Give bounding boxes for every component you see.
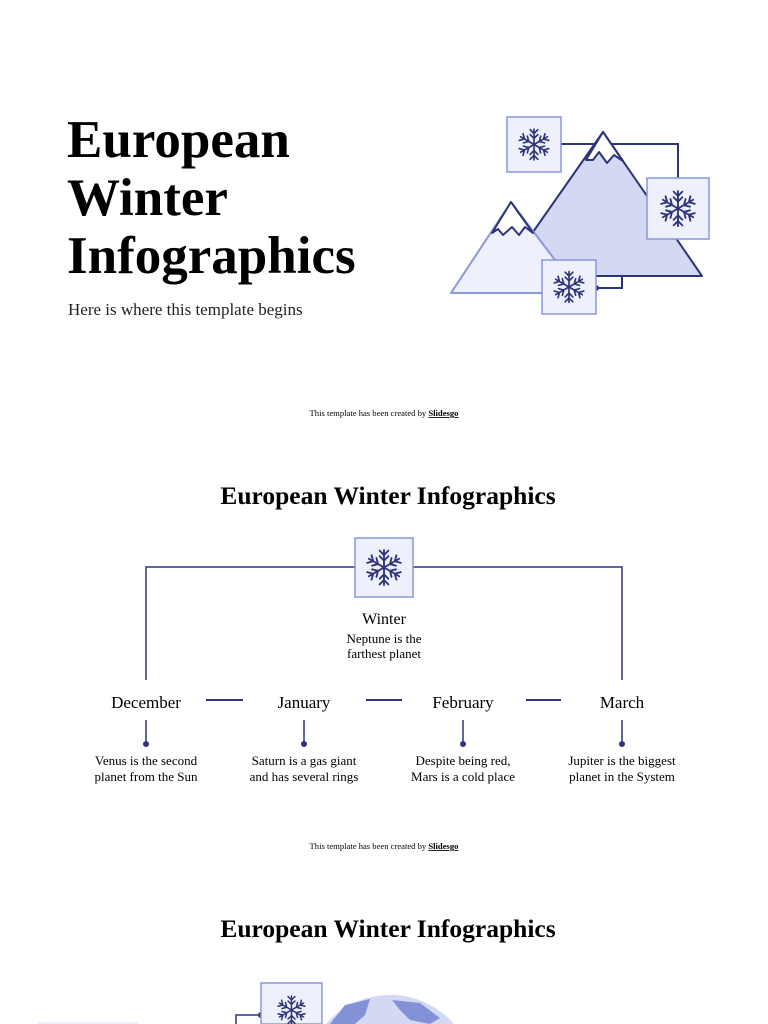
left panel (38, 1022, 138, 1024)
month: January (250, 693, 358, 784)
icon: winter snowflake box (355, 538, 413, 597)
icon: snowflake box globe (261, 983, 322, 1024)
month: March: March (600, 693, 645, 712)
title: Winter (67, 169, 228, 227)
heading section 3: European Winter Infographics (220, 914, 556, 943)
month: December: Venus is the second (95, 753, 198, 768)
month: February: Despite being red, (416, 753, 510, 768)
subtitle: Here is where this template begins (68, 300, 303, 319)
credit 2: This template has been created by Slidesgo (310, 841, 458, 851)
month: January: Saturn is a gas giant (252, 753, 357, 768)
month: January: January (278, 693, 331, 712)
small mountain (451, 202, 580, 293)
heading section 2: European Winter Infographics (220, 481, 556, 510)
icon: snowflake box top-left (507, 117, 561, 172)
title: Infographics (67, 227, 356, 285)
winter label: farthest planet (347, 646, 421, 661)
globe (326, 995, 454, 1024)
month: December (95, 693, 198, 784)
mountains illustration (451, 117, 709, 314)
winter label: Winter (362, 611, 407, 628)
bracket lines (146, 567, 622, 680)
month: February: Mars is a cold place (411, 769, 515, 784)
dashes (206, 699, 561, 701)
month: March: Jupiter is the biggest (568, 753, 676, 768)
big mountain (533, 132, 702, 276)
month: March (568, 693, 676, 784)
month: January: and has several rings (250, 769, 358, 784)
month: March: planet in the System (569, 769, 675, 784)
title (67, 111, 356, 285)
globe section partial (38, 983, 454, 1024)
icon: snowflake box right (647, 178, 709, 239)
month: February (411, 693, 515, 784)
month: December: December (111, 693, 181, 712)
winter label: Neptune is the (346, 631, 422, 646)
winter label (346, 611, 422, 661)
credit 1: This template has been created by Slidesgo (310, 408, 458, 418)
icon: snowflake box bottom (542, 260, 596, 314)
timeline diagram (95, 538, 676, 784)
month: February: February (432, 693, 494, 712)
month: December: planet from the Sun (95, 769, 198, 784)
connector (236, 1015, 261, 1024)
title: European (67, 111, 290, 169)
connector lines (561, 144, 678, 288)
